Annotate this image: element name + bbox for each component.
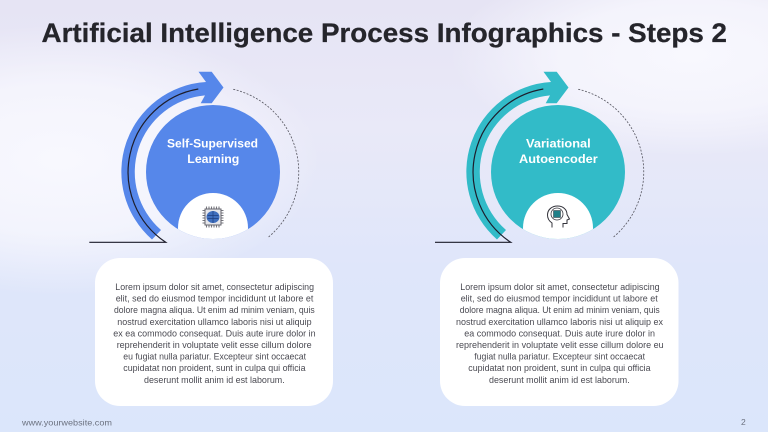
footer website: www.yourwebsite.com xyxy=(21,418,112,428)
description text: reprehenderit in voluptate velit esse cillum dolore xyxy=(117,340,312,350)
black arc line xyxy=(89,89,198,242)
circular arrow xyxy=(121,72,224,240)
description text: eu fugiat nulla pariatur. Excepteur sint occaecat xyxy=(123,352,306,362)
description text xyxy=(456,282,664,385)
dashed arc xyxy=(233,89,299,238)
description text: reprehenderit in voluptate velit esse cillum dolore eu xyxy=(456,340,664,350)
description text: Lorem ipsum dolor sit amet, consectetur adipiscing xyxy=(115,282,314,292)
circle label xyxy=(167,136,258,166)
panel: self-supervised learning diagram xyxy=(89,72,299,263)
description text: nostrud exercitation ullamco laboris nisi ut aliquip xyxy=(117,317,312,327)
circle label: Learning xyxy=(187,152,239,166)
panel: variational autoencoder diagram xyxy=(435,72,644,243)
description text: ex ea commodo consequat. Duis aute irure dolor in xyxy=(113,328,316,338)
page number: 2 xyxy=(741,417,746,427)
black arc line xyxy=(435,89,543,242)
description text: deserunt mollit anim id est laborum. xyxy=(489,375,630,385)
white dome xyxy=(178,193,248,239)
circle label: Autoencoder xyxy=(519,152,598,166)
description text: ea commodo consequat. Duis aute irure dolor in xyxy=(464,328,655,338)
circle label: Variational xyxy=(526,136,591,150)
circular arrow xyxy=(466,72,568,240)
white dome xyxy=(523,193,593,239)
panel: self-supervised description card xyxy=(95,258,333,406)
description text xyxy=(113,282,316,385)
main circle xyxy=(491,105,625,239)
description text: elit, sed do eiusmod tempor incididunt ut labore et xyxy=(116,294,314,304)
description text: cupidatat non proident, sunt in culpa qui officia xyxy=(468,363,651,373)
description text: dolore magna aliqua. Ut enim ad minim veniam, quis xyxy=(114,305,315,315)
main circle xyxy=(146,105,280,239)
circle label xyxy=(519,136,598,166)
dashed arc xyxy=(578,89,644,238)
description text: deserunt mollit anim id est laborum. xyxy=(144,375,285,385)
title: Artificial Intelligence Process Infographics - Steps 2 xyxy=(42,18,727,48)
description text: elit, sed do eiusmod tempor incididunt ut labore et xyxy=(461,294,658,304)
description text: cupidatat non proident, sunt in culpa qui officia xyxy=(123,363,306,373)
description text: nostrud exercitation ullamco laboris nisi ut aliquip ex xyxy=(456,317,663,327)
icon: brain chip xyxy=(202,206,224,228)
description text: Lorem ipsum dolor sit amet, consectetur adipiscing xyxy=(460,282,660,292)
circle label: Self-Supervised xyxy=(167,136,258,150)
panel: variational autoencoder description card xyxy=(440,258,678,406)
description text: fugiat nulla pariatur. Excepteur sint occaecat xyxy=(474,352,645,362)
description text: dolore magna aliqua. Ut enim ad minim veniam, quis xyxy=(460,305,660,315)
icon: head with chip xyxy=(548,206,570,228)
